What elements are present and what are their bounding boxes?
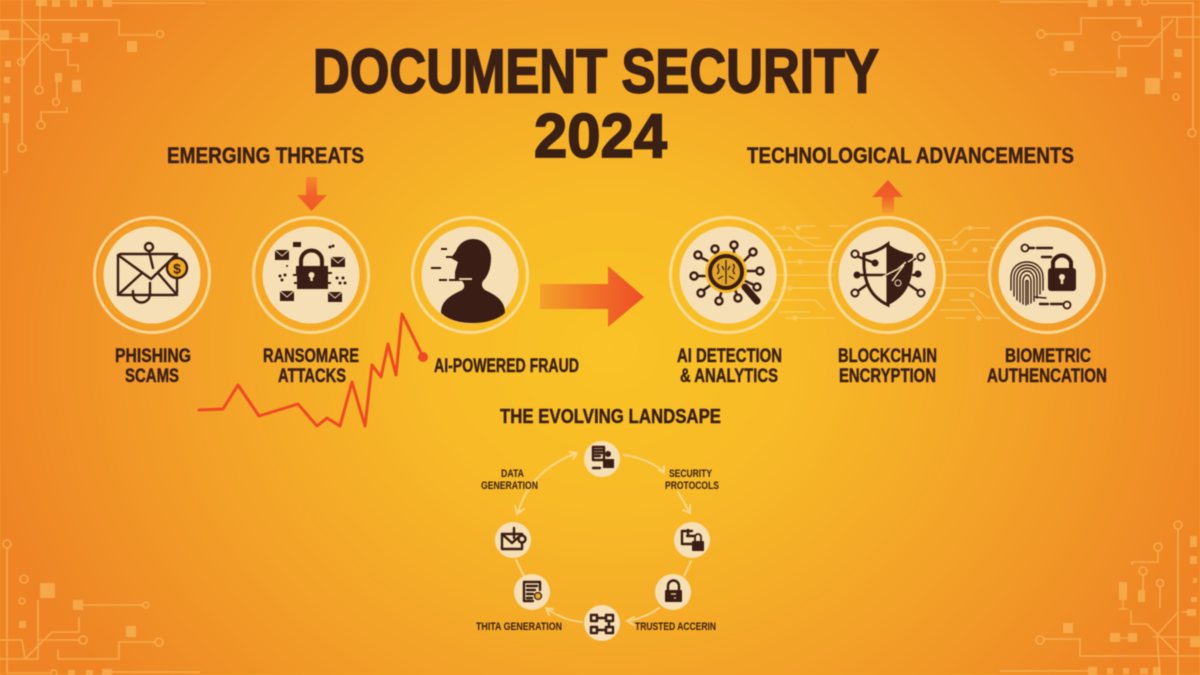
title: DOCUMENT SECURITY xyxy=(313,38,879,106)
icon: phishing envelope: $ xyxy=(173,260,181,276)
line chart: rising threat trend xyxy=(199,314,428,426)
cycle labels: SECURITY xyxy=(669,468,713,480)
panel: biometric authentication: BIOMETRIC xyxy=(1005,346,1091,367)
circuit connections between technology circles xyxy=(770,226,1000,320)
panel: ransomware attacks: ATTACKS xyxy=(278,366,346,387)
node: document and laptop xyxy=(584,441,620,477)
panel: phishing scams: PHISHING xyxy=(115,346,191,367)
arrow: up from advancements xyxy=(872,180,903,213)
cycle labels: PROTOCOLS xyxy=(665,480,719,492)
heading: the evolving landscape: THE EVOLVING LANDSAPE xyxy=(500,405,721,428)
node: workflow lock xyxy=(674,522,710,558)
title: 2024 xyxy=(534,102,667,171)
node: padlock xyxy=(655,574,691,610)
circuit decoration: top left corner xyxy=(0,0,205,172)
icon: circuit shield xyxy=(852,244,924,305)
cycle arrows xyxy=(515,452,691,625)
cycle labels: TRUSTED ACCERIN xyxy=(635,621,716,633)
cycle diagram: evolving landscape xyxy=(476,441,719,641)
panel: AI detection and analytics xyxy=(670,218,786,387)
icon: magnifier with brain and nodes xyxy=(690,242,764,304)
cycle labels: THITA GENERATION xyxy=(476,621,562,633)
cycle labels xyxy=(476,468,719,633)
cycle labels: GENERATION xyxy=(481,480,538,492)
panel: blockchain encryption: ENCRYPTION xyxy=(839,366,936,387)
panel: blockchain encryption: BLOCKCHAIN xyxy=(838,346,937,367)
heading: technological advancements: TECHNOLOGICAL ADVANCEMENTS xyxy=(747,143,1074,168)
panel: AI-powered fraud: AI-POWERED FRAUD xyxy=(434,356,579,377)
node: connected blocks xyxy=(584,605,620,641)
circuit decoration: bottom left corner xyxy=(0,540,200,675)
node: document with seal xyxy=(514,574,550,610)
icon: blurred face silhouette xyxy=(431,239,505,323)
circuit decoration: bottom right corner xyxy=(1000,521,1200,675)
icon: padlock with envelopes xyxy=(275,242,346,302)
arrow: down to threats xyxy=(297,177,327,211)
panel: ransomware attacks: RANSOMARE xyxy=(263,346,359,367)
panel: phishing scams: SCAMS xyxy=(125,366,179,387)
cycle labels: DATA xyxy=(501,468,524,480)
node: hooked envelope xyxy=(495,522,531,558)
panel: biometric authentication xyxy=(987,218,1107,387)
icon: phishing envelope xyxy=(118,243,187,302)
panel: AI detection and analytics: AI DETECTION xyxy=(677,346,782,367)
panel: AI detection and analytics: & ANALYTICS xyxy=(680,366,778,387)
icon: fingerprint and padlock xyxy=(1011,244,1076,308)
heading: emerging threats: EMERGING THREATS xyxy=(167,143,364,168)
panel: blockchain encryption xyxy=(830,218,944,387)
panel: phishing scams xyxy=(94,218,210,387)
arrow: threats to advancements xyxy=(540,266,644,327)
panel: ransomware attacks xyxy=(254,218,368,387)
panel: biometric authentication: AUTHENCATION xyxy=(987,366,1107,387)
panel: AI-powered fraud xyxy=(412,218,579,377)
title xyxy=(313,38,879,171)
circuit decoration: top right corner xyxy=(1000,0,1200,137)
